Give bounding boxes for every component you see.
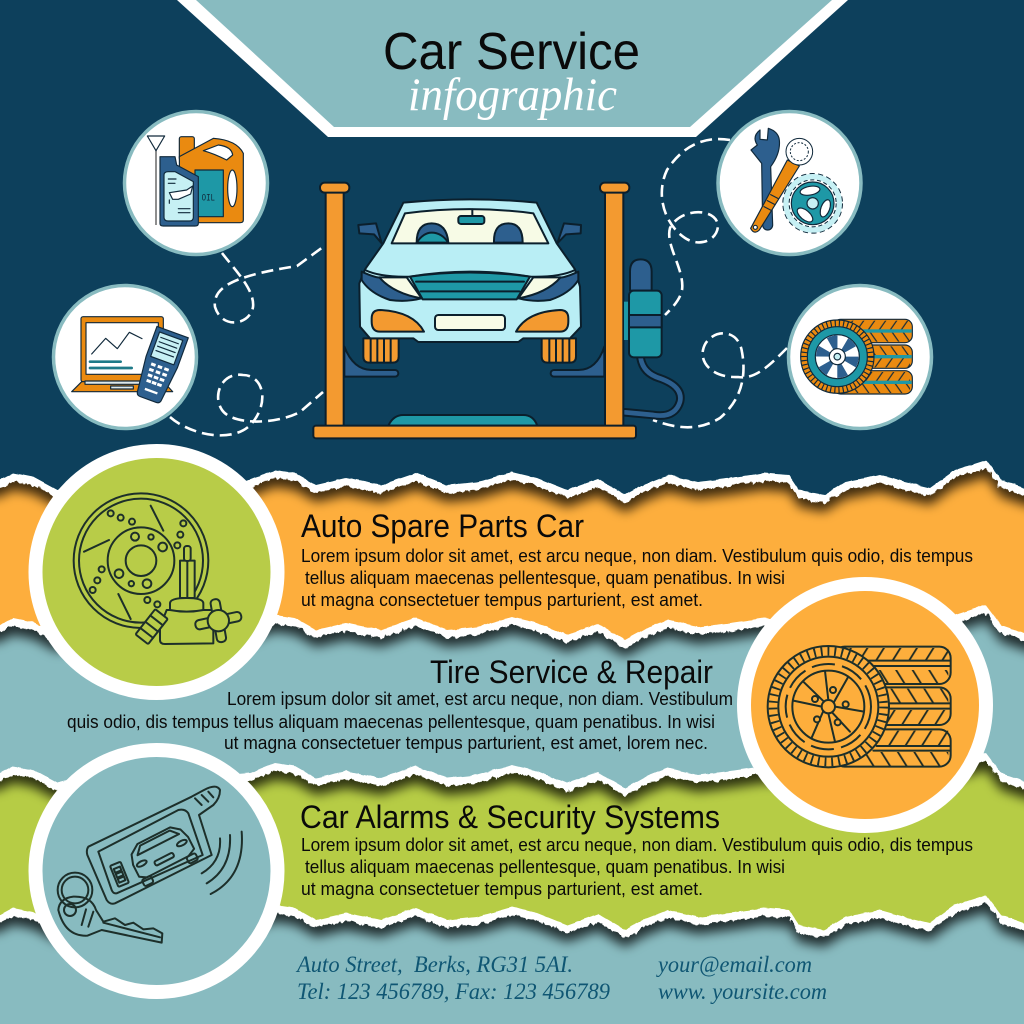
header banner bbox=[177, 0, 848, 137]
tires icon circle bbox=[788, 286, 932, 428]
adjustable wrench bbox=[751, 128, 779, 230]
circle: tires bbox=[744, 584, 986, 826]
text: car alarms bbox=[300, 799, 973, 899]
headlights bbox=[362, 272, 578, 301]
text: auto spare parts bbox=[301, 508, 973, 610]
text: tire service: Lorem ipsum dolor sit amet, est arcu neque, non diam. Vestibulum bbox=[227, 688, 733, 709]
lift platform bbox=[388, 415, 537, 426]
air tank bbox=[624, 259, 662, 357]
diagnostics icon circle bbox=[54, 286, 196, 428]
fog lights bbox=[372, 310, 568, 332]
brake disc bbox=[74, 493, 208, 628]
windshield bbox=[392, 209, 548, 243]
car on lift illustration bbox=[313, 183, 680, 438]
number plate bbox=[435, 315, 505, 330]
alarm key fob bbox=[87, 787, 220, 904]
lift base bbox=[313, 426, 636, 438]
text: tire service: quis odio, dis tempus tellus aliquam maecenas pellentesque, quam penatibus. In wisi bbox=[67, 711, 715, 732]
text: car alarms: tellus aliquam maecenas pellentesque, quam penatibus. In wisi bbox=[305, 856, 785, 877]
text: tire service: ut magna consectetuer tempus parturient, est amet, lorem nec. bbox=[224, 732, 708, 753]
title: Car Service bbox=[383, 23, 640, 81]
key and ring bbox=[58, 873, 162, 943]
panel: tire service band bbox=[0, 0, 1024, 805]
text: tire service: Tire Service & Repair bbox=[430, 654, 713, 690]
signal waves bbox=[202, 832, 242, 894]
footer contact details: your@email.com bbox=[656, 952, 812, 978]
car body bbox=[359, 199, 581, 342]
dipstick bbox=[147, 136, 165, 225]
wheels bbox=[363, 338, 576, 363]
ring spanner bbox=[751, 138, 813, 232]
dashed connector: oil to lift bbox=[215, 247, 323, 322]
text: car alarms: Lorem ipsum dolor sit amet, est arcu neque, non diam. Vestibulum quis odio, dis tempus bbox=[301, 834, 973, 855]
tools icon circle bbox=[718, 112, 861, 254]
laptop bbox=[72, 317, 173, 392]
footer contact details: Tel: 123 456789, Fax: 123 456789 bbox=[297, 979, 610, 1005]
lift arms bbox=[344, 347, 604, 377]
hood line bbox=[365, 270, 575, 277]
hose bbox=[625, 358, 680, 416]
seats bbox=[417, 223, 523, 243]
subtitle: infographic bbox=[408, 69, 617, 121]
text: car alarms: ut magna consectetuer tempus parturient, est amet. bbox=[301, 878, 703, 899]
footer contact details: Auto Street, Berks, RG31 5AI. bbox=[295, 952, 573, 978]
handheld scanner bbox=[132, 326, 188, 405]
footer contact details bbox=[295, 952, 827, 1005]
front wheel bbox=[801, 320, 874, 393]
headlamp bulb bbox=[136, 546, 242, 644]
rear view mirror bbox=[458, 209, 484, 224]
blue bottle bbox=[160, 157, 198, 226]
circle: spare parts bbox=[36, 451, 278, 693]
footer contact details: www. yoursite.com bbox=[658, 979, 827, 1005]
line wheel bbox=[768, 646, 889, 767]
panel: auto spare parts band bbox=[0, 0, 1024, 657]
side mirrors bbox=[358, 223, 581, 243]
oil icon circle bbox=[124, 112, 268, 254]
text: auto spare parts: ut magna consectetuer tempus parturient, est amet. bbox=[301, 589, 703, 610]
text: auto spare parts: Lorem ipsum dolor sit amet, est arcu neque, non diam. Vestibulum quis odio, dis tempus bbox=[301, 545, 973, 566]
grille bbox=[410, 272, 530, 299]
line tire stack bbox=[833, 647, 951, 767]
dashed connector: tires to lift bbox=[653, 333, 787, 427]
panel: navy header area bbox=[0, 0, 1024, 512]
lift posts bbox=[320, 183, 629, 426]
orange canister: OIL bbox=[202, 193, 215, 204]
text: tire service bbox=[67, 654, 733, 753]
text: auto spare parts: tellus aliquam maecenas pellentesque, quam penatibus. In wisi bbox=[305, 567, 785, 588]
dashed connector: diagnostics to lift bbox=[170, 375, 323, 435]
gear bbox=[786, 177, 839, 230]
text: car alarms: Car Alarms & Security Systems bbox=[300, 799, 720, 835]
text: auto spare parts: Auto Spare Parts Car bbox=[301, 508, 584, 544]
dashed connector: tools to lift bbox=[662, 139, 730, 315]
circle: car alarm bbox=[36, 750, 278, 992]
tire stack bbox=[833, 319, 912, 394]
